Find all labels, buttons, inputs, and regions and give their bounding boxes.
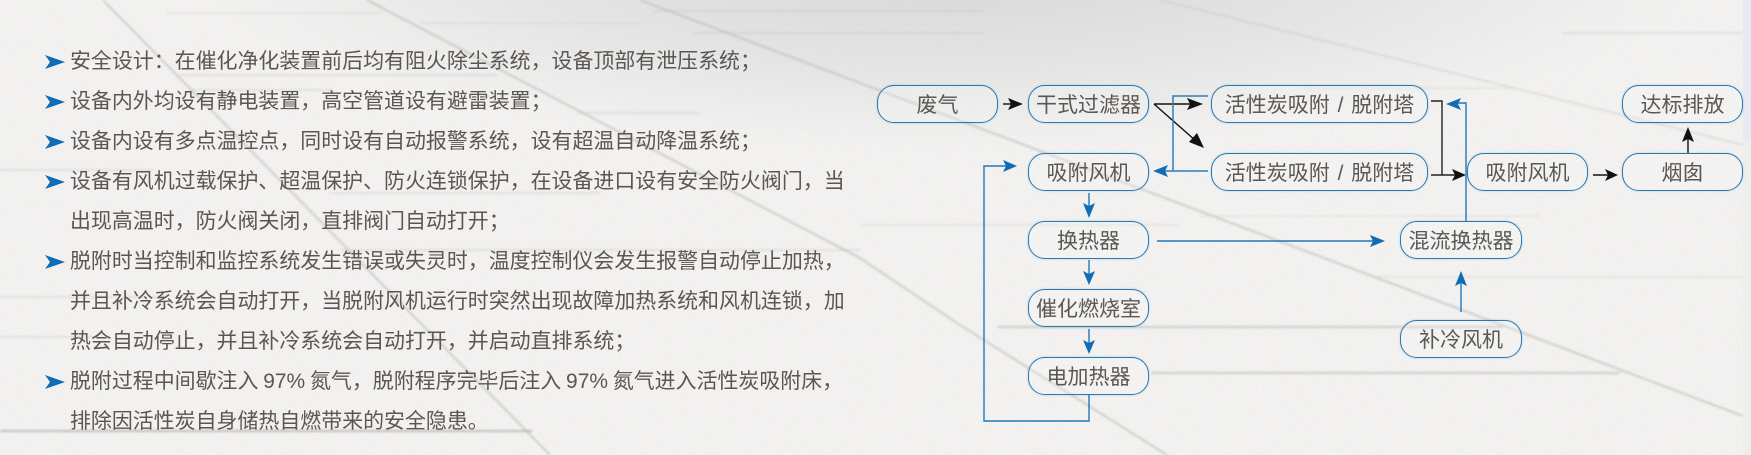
node: left adsorption fan: [1028, 153, 1149, 191]
bullet icon 5: [45, 255, 65, 269]
arrow: chimney to discharge: [1682, 127, 1694, 153]
node: right adsorption fan: [1467, 153, 1588, 191]
bullet item 5: desorption failure handling: 热会自动停止，并且补冷系统会自动打开，并启动直排系统；: [70, 330, 635, 353]
bullet item 4: fan and fire protection: 出现高温时，防火阀关闭，直排阀门自动打开；: [70, 210, 510, 233]
bullet icon 3: [45, 135, 65, 149]
arrow: right fan to chimney: [1593, 169, 1618, 181]
node: mixing heat exchanger: 混流换热器: [1408, 230, 1514, 253]
node: electric heater: [1028, 357, 1149, 395]
arrow: filter to lower adsorption tower: [1154, 104, 1204, 148]
node: catalytic combustion chamber: 催化燃烧室: [1036, 298, 1141, 321]
arrow: filter to upper adsorption tower: [1154, 98, 1203, 110]
node: waste gas: [877, 85, 998, 123]
arrow: left fan to heat exchanger: [1083, 193, 1095, 218]
arrow: heat exchanger to mixing exchanger: [1157, 235, 1385, 247]
arrow: towers to right adsorption fan: [1431, 101, 1466, 181]
node: discharge to standard: 达标排放: [1640, 94, 1724, 117]
node: dry filter: [1028, 85, 1149, 123]
bullet item 5: desorption failure handling: 脱附时当控制和监控系统发生错误或失灵时，温度控制仪会发生报警自动停止加热，: [70, 250, 845, 273]
arrow: heat exchanger to catalytic chamber: [1083, 260, 1095, 285]
node: upper adsorption tower: 活性炭吸附 / 脱附塔: [1225, 94, 1414, 117]
node: electric heater: 电加热器: [1046, 366, 1130, 389]
bullet item 4: fan and fire protection: 设备有风机过载保护、超温保护、防火连锁保护，在设备进口设有安全防火阀门，当: [70, 170, 845, 193]
node: lower adsorption tower: 活性炭吸附 / 脱附塔: [1225, 162, 1414, 185]
bullet item 3: temperature control: 设备内设有多点温控点，同时设有自动报警系统，设有超温自动降温系统；: [70, 130, 761, 153]
node: make-up air fan: [1400, 320, 1522, 358]
node: mixing heat exchanger: [1400, 221, 1522, 259]
bullet item 2: static electricity and lightning: 设备内外均设有静电装置，高空管道设有避雷装置；: [70, 90, 552, 113]
node: catalytic combustion chamber: [1028, 289, 1149, 327]
bullet item 6: nitrogen injection: 排除因活性炭自身储热自燃带来的安全隐患。: [70, 410, 489, 433]
node: heat exchanger: [1028, 221, 1149, 259]
node: waste gas: 废气: [916, 94, 958, 117]
node: make-up air fan: 补冷风机: [1419, 329, 1503, 352]
node: dry filter: 干式过滤器: [1036, 94, 1141, 117]
bullet item 6: nitrogen injection: 脱附过程中间歇注入 97% 氮气，脱附程序完毕后注入 97% 氮气进入活性炭吸附床，: [70, 370, 843, 393]
node: right adsorption fan: 吸附风机: [1486, 162, 1570, 185]
bullet icon 6: [45, 375, 65, 389]
bullet item 6: nitrogen injection: [70, 370, 843, 433]
node: lower adsorption tower: [1211, 153, 1428, 191]
bullet item 5: desorption failure handling: 并且补冷系统会自动打开，当脱附风机运行时突然出现故障加热系统和风机连锁，加: [70, 290, 845, 313]
bullet icon 2: [45, 95, 65, 109]
node: left adsorption fan: 吸附风机: [1046, 162, 1130, 185]
arrow: catalytic chamber to electric heater: [1083, 329, 1095, 354]
bullet item 1: safety design: 安全设计：在催化净化装置前后均有阻火除尘系统，设备顶部有泄压系统；: [70, 50, 761, 73]
arrow: towers to left adsorption fan: [1153, 96, 1208, 177]
bullet icon 1: [45, 55, 65, 69]
bullet icon 4: [45, 175, 65, 189]
arrow: electric heater loop back to fan: [984, 160, 1089, 421]
node: chimney: 烟囱: [1662, 162, 1704, 185]
arrow: make-up air fan to mixing exchanger: [1455, 271, 1467, 312]
arrow: waste gas to dry filter: [1003, 98, 1023, 110]
node: upper adsorption tower: [1211, 85, 1428, 123]
bullet item 5: desorption failure handling: [70, 250, 845, 353]
node: heat exchanger: 换热器: [1057, 230, 1120, 253]
bullet item 4: fan and fire protection: [70, 170, 845, 233]
node: discharge to standard: [1622, 85, 1743, 123]
arrow: mixing heat exchanger up to upper tower: [1446, 98, 1466, 222]
node: chimney: [1622, 153, 1743, 191]
